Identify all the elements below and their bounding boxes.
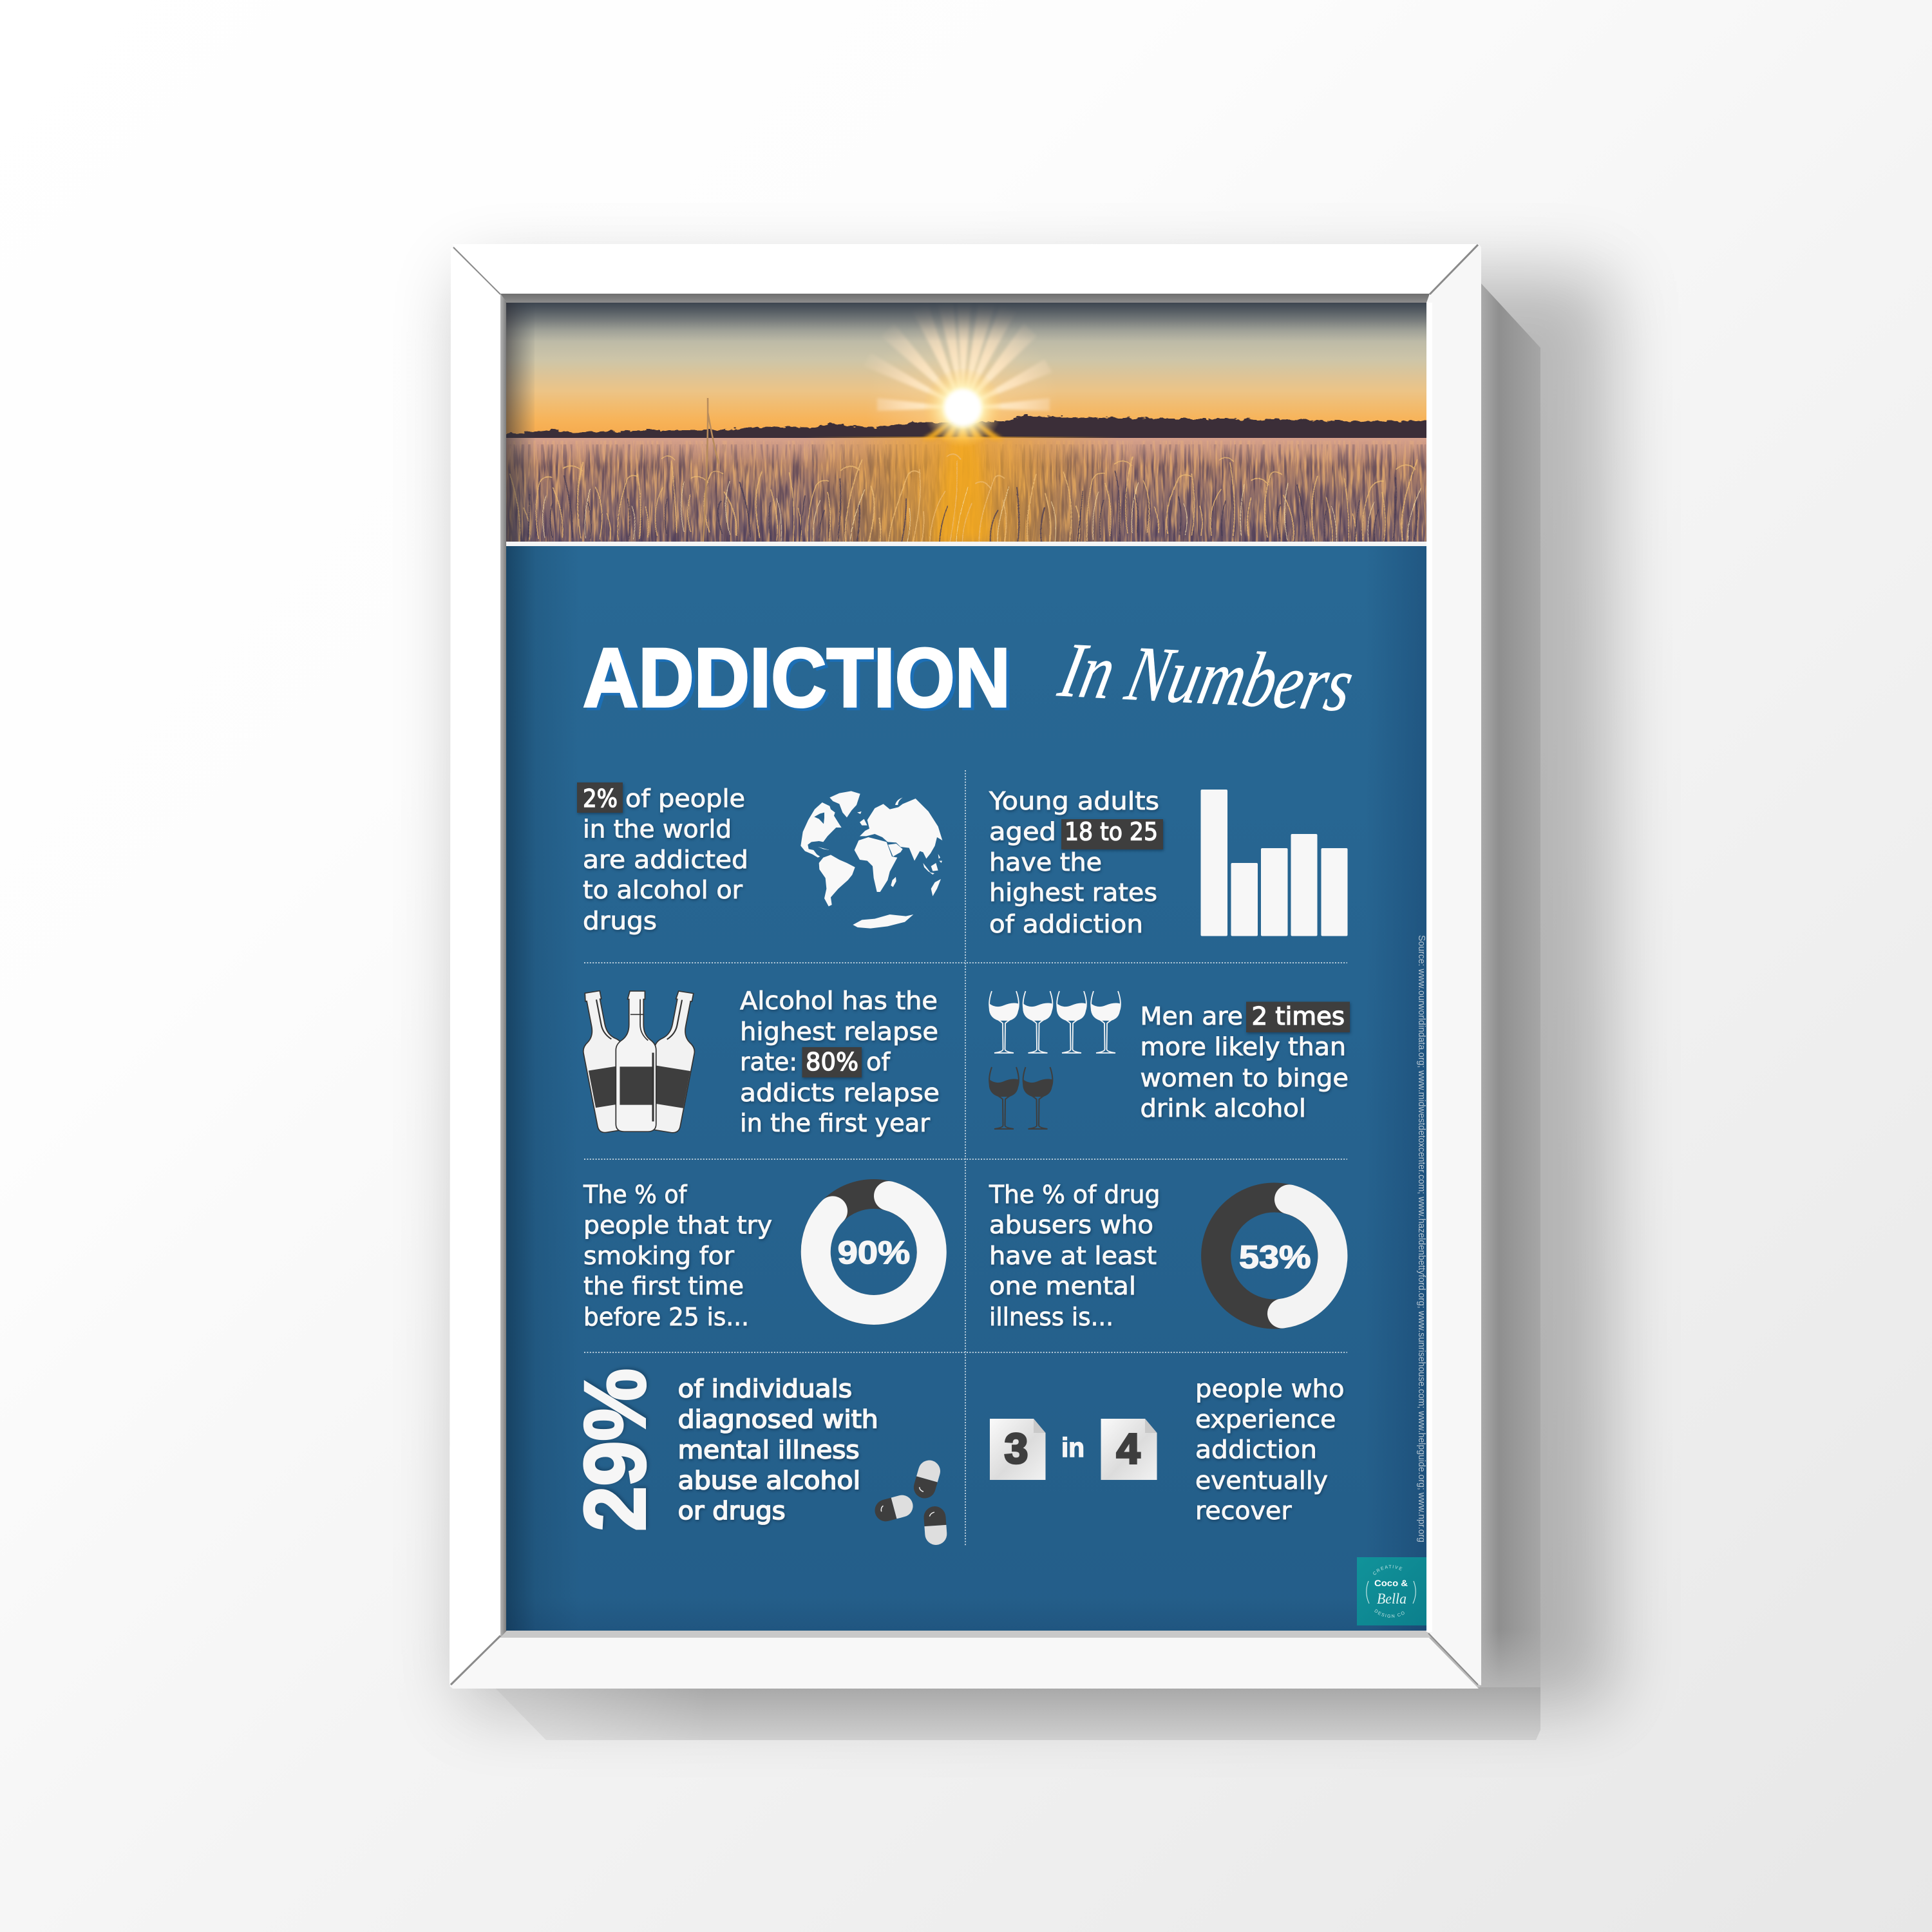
source text: Source: www.ourworldindata.org; www.midwestdetoxcenter.com; www.hazeldenbettyford.org; www.sunrisehouse.com; www.helpguide.org; www.npr.org bbox=[1416, 935, 1426, 1542]
bar chart bbox=[1200, 790, 1347, 936]
stat: 2% of people bbox=[577, 782, 748, 935]
card: 3 bbox=[990, 1419, 1046, 1480]
donut chart: 53% bbox=[1216, 1198, 1332, 1314]
sun disc bbox=[944, 389, 981, 426]
stat: diagnosed text: diagnosed with bbox=[678, 1405, 878, 1434]
stat: mental illness text bbox=[989, 1180, 1160, 1331]
frame: inner bevel left bbox=[500, 294, 507, 1638]
logo: Coco & Bella bbox=[1357, 1557, 1426, 1625]
logo: Coco & Bella: CREATIVE bbox=[1373, 1565, 1403, 1575]
text: 2% of people: drugs bbox=[583, 907, 657, 935]
frame: top bbox=[452, 244, 1479, 294]
text: 2% of people: 2% bbox=[583, 784, 618, 813]
text: 2% of people bbox=[583, 784, 748, 935]
lower sun fan bbox=[922, 412, 1003, 440]
stat: diagnosed text: of individuals bbox=[678, 1375, 852, 1403]
sunset wheat field photo bbox=[502, 300, 1430, 542]
sun rays bbox=[875, 310, 1051, 412]
stat: people who recover: addiction bbox=[1195, 1435, 1317, 1464]
icon: pills bbox=[873, 1457, 947, 1546]
text: young adults: 18 to 25 bbox=[1065, 818, 1158, 846]
stat: mental illness text: abusers who bbox=[989, 1211, 1153, 1239]
text: alcohol relapse: Alcohol has the bbox=[740, 987, 938, 1015]
card: 4 bbox=[1101, 1419, 1157, 1480]
stat: mental illness text: illness is... bbox=[989, 1303, 1113, 1331]
text: 2% of people: to alcohol or bbox=[583, 876, 743, 904]
grass stems bbox=[506, 444, 1426, 542]
stat: diagnosed text: mental illness bbox=[678, 1435, 860, 1464]
text: 2% of people: in the world bbox=[583, 815, 732, 844]
tree line bbox=[506, 414, 1426, 438]
sun reflection bbox=[934, 437, 992, 542]
stat: smoking text: before 25 is... bbox=[583, 1303, 749, 1331]
poster frame bbox=[450, 244, 1481, 1689]
stat: people who recover: eventually bbox=[1195, 1466, 1328, 1495]
stat: young adults 18 to 25 bbox=[989, 787, 1163, 938]
title: In Numbers: In Numbers bbox=[1052, 626, 1361, 728]
highlight: 2 times bbox=[1246, 1002, 1350, 1032]
stat: people who recover: recover bbox=[1195, 1497, 1292, 1525]
hard frame shadow bbox=[495, 282, 1540, 1740]
text: alcohol relapse: in the first year bbox=[740, 1109, 930, 1137]
text: alcohol relapse: of bbox=[866, 1048, 891, 1076]
stat: smoking text bbox=[583, 1180, 772, 1331]
stat: people who recover: experience bbox=[1195, 1405, 1336, 1434]
title: ADDICTION: ADDICTION bbox=[583, 630, 1010, 724]
card: 3: 3 bbox=[1005, 1425, 1028, 1472]
stat: people who recover: people who bbox=[1195, 1375, 1345, 1403]
big number: 29%: 29% bbox=[567, 1368, 663, 1531]
stat: mental illness text: one mental bbox=[989, 1272, 1136, 1300]
stat: men binge drink bbox=[1140, 1002, 1350, 1122]
donut chart: 90% bbox=[816, 1194, 932, 1310]
photo inner shadow left bbox=[506, 303, 535, 542]
text: alcohol relapse: 80% bbox=[806, 1048, 858, 1076]
frame: inner bevel top bbox=[500, 294, 1430, 303]
tall stem bbox=[703, 398, 719, 542]
text: young adults: highest rates bbox=[989, 878, 1157, 907]
right bottle bbox=[639, 989, 706, 1134]
icon: world globe bbox=[800, 791, 942, 929]
logo: Coco & Bella: DESIGN CO bbox=[1374, 1609, 1405, 1618]
frame: right bbox=[1426, 245, 1481, 1685]
grass texture: light bbox=[506, 440, 1426, 542]
icon: three wine bottles bbox=[573, 989, 706, 1134]
field top haze bbox=[506, 438, 1426, 467]
text: alcohol relapse: addicts relapse bbox=[740, 1079, 940, 1107]
stat: smoking text: smoking for bbox=[583, 1242, 734, 1270]
text: young adults: of addiction bbox=[989, 910, 1143, 938]
text: men binge drink: drink alcohol bbox=[1140, 1094, 1306, 1122]
frame: bottom bbox=[450, 1636, 1479, 1689]
text: 2% of people: are addicted bbox=[583, 846, 748, 874]
frame: left bbox=[450, 247, 501, 1685]
stat: diagnosed text: abuse alcohol bbox=[678, 1466, 860, 1495]
icon: wine glasses bbox=[989, 991, 1121, 1129]
stat: people who recover bbox=[1195, 1375, 1345, 1525]
dark glasses bbox=[989, 1067, 1052, 1129]
text: men binge drink: more likely than bbox=[1140, 1033, 1346, 1061]
stat: diagnosed text: or drugs bbox=[678, 1497, 786, 1525]
frame: mitre lines bbox=[451, 245, 1478, 1685]
text: men binge drink: 2 times bbox=[1252, 1002, 1345, 1030]
soft wall shadow bbox=[464, 274, 1610, 1707]
stat: alcohol relapse bbox=[740, 987, 940, 1137]
highlight: 2% bbox=[577, 782, 623, 813]
field base bbox=[506, 438, 1426, 542]
title: ADDICTION: ADDICTION bbox=[586, 633, 1014, 727]
logo: Coco & Bella: Coco & bbox=[1374, 1578, 1408, 1588]
text: men binge drink: women to binge bbox=[1140, 1064, 1349, 1092]
value: 90%: 90% bbox=[838, 1235, 910, 1271]
text: young adults: Young adults bbox=[989, 787, 1159, 815]
grid dividers bbox=[584, 770, 1347, 1546]
white separator bbox=[506, 542, 1426, 547]
stat: smoking text: people that try bbox=[583, 1211, 772, 1239]
white glasses bbox=[989, 991, 1121, 1053]
stat: mental illness text: have at least bbox=[989, 1242, 1157, 1270]
stat: diagnosed text bbox=[678, 1375, 878, 1525]
text: young adults: have the bbox=[989, 848, 1102, 876]
text: young adults bbox=[989, 787, 1159, 938]
card: 4: 4 bbox=[1117, 1425, 1141, 1472]
pill 3 bbox=[923, 1506, 947, 1546]
photo inner shadow top bbox=[506, 303, 1426, 341]
text: alcohol relapse: highest relapse bbox=[740, 1018, 938, 1046]
text: men binge drink bbox=[1140, 1002, 1349, 1122]
stat: smoking text: The % of bbox=[583, 1180, 688, 1209]
text: alcohol relapse: rate: bbox=[740, 1048, 797, 1076]
panel: blue infographic bbox=[506, 546, 1426, 1631]
label: in: in bbox=[1061, 1432, 1084, 1463]
golden light on field bbox=[805, 437, 1121, 542]
stat: smoking text: the first time bbox=[583, 1272, 744, 1300]
frame: inner bevel bottom bbox=[500, 1631, 1431, 1638]
sun glow halo bbox=[884, 336, 1041, 426]
logo: Coco & Bella: Bella bbox=[1377, 1591, 1406, 1607]
pill 1 bbox=[911, 1457, 943, 1501]
text: young adults: aged bbox=[989, 818, 1056, 846]
text: men binge drink: Men are bbox=[1140, 1002, 1243, 1030]
text: 2% of people: of people bbox=[625, 784, 745, 813]
stat: mental illness text: The % of drug bbox=[989, 1180, 1160, 1209]
center bottle bbox=[616, 991, 656, 1132]
left bottle bbox=[573, 989, 639, 1133]
highlight: 80% bbox=[802, 1047, 862, 1077]
value: 53%: 53% bbox=[1239, 1239, 1311, 1275]
highlight: 18 to 25 bbox=[1061, 819, 1163, 849]
grass texture: dark bbox=[506, 444, 1426, 542]
sky bbox=[506, 303, 1426, 448]
text: alcohol relapse bbox=[740, 987, 940, 1137]
pill 2 bbox=[873, 1493, 915, 1524]
sun glow bbox=[923, 368, 1003, 448]
